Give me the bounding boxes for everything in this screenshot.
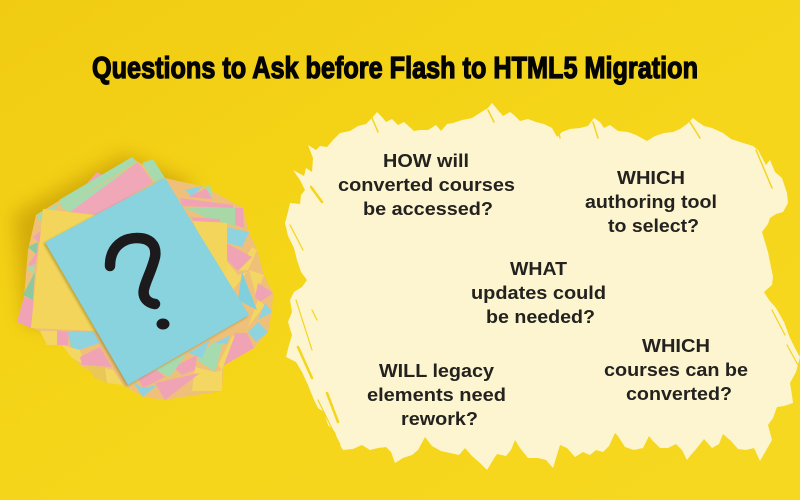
question: how: be accessed? [363, 199, 493, 219]
yellow note, right side [193, 221, 227, 275]
question: how: HOW will [383, 151, 469, 171]
question: which authoring tool [585, 168, 717, 236]
question: what updates: updates could [471, 283, 606, 303]
question: what updates [471, 259, 606, 327]
blue note [45, 178, 249, 385]
under notes [17, 157, 273, 400]
blue note shadow [44, 180, 248, 386]
question: what updates: WHAT [510, 259, 567, 279]
question: which authoring tool: authoring tool [585, 192, 717, 212]
question: will legacy elements: rework? [401, 409, 478, 429]
question: which courses: converted? [626, 384, 732, 404]
question: which courses: courses can be [604, 360, 748, 380]
question: which courses [604, 336, 748, 404]
icon: question mark [110, 238, 170, 330]
question: which courses: WHICH [642, 336, 710, 356]
stack shadow [14, 154, 194, 334]
question: which authoring tool: to select? [608, 216, 699, 236]
question: will legacy elements [367, 361, 506, 429]
question: what updates: be needed? [486, 307, 595, 327]
yellow brush streaks [290, 110, 798, 445]
question: will legacy elements: elements need [367, 385, 506, 405]
question: will legacy elements: WILL legacy [379, 361, 494, 381]
yellow note [31, 209, 110, 331]
brush-stroke panel [285, 103, 800, 470]
sticky note stack with question mark [14, 154, 273, 400]
stack base [17, 160, 273, 400]
question: how: converted courses [338, 175, 515, 195]
question: how [338, 151, 515, 219]
question: which authoring tool: WHICH [617, 168, 685, 188]
